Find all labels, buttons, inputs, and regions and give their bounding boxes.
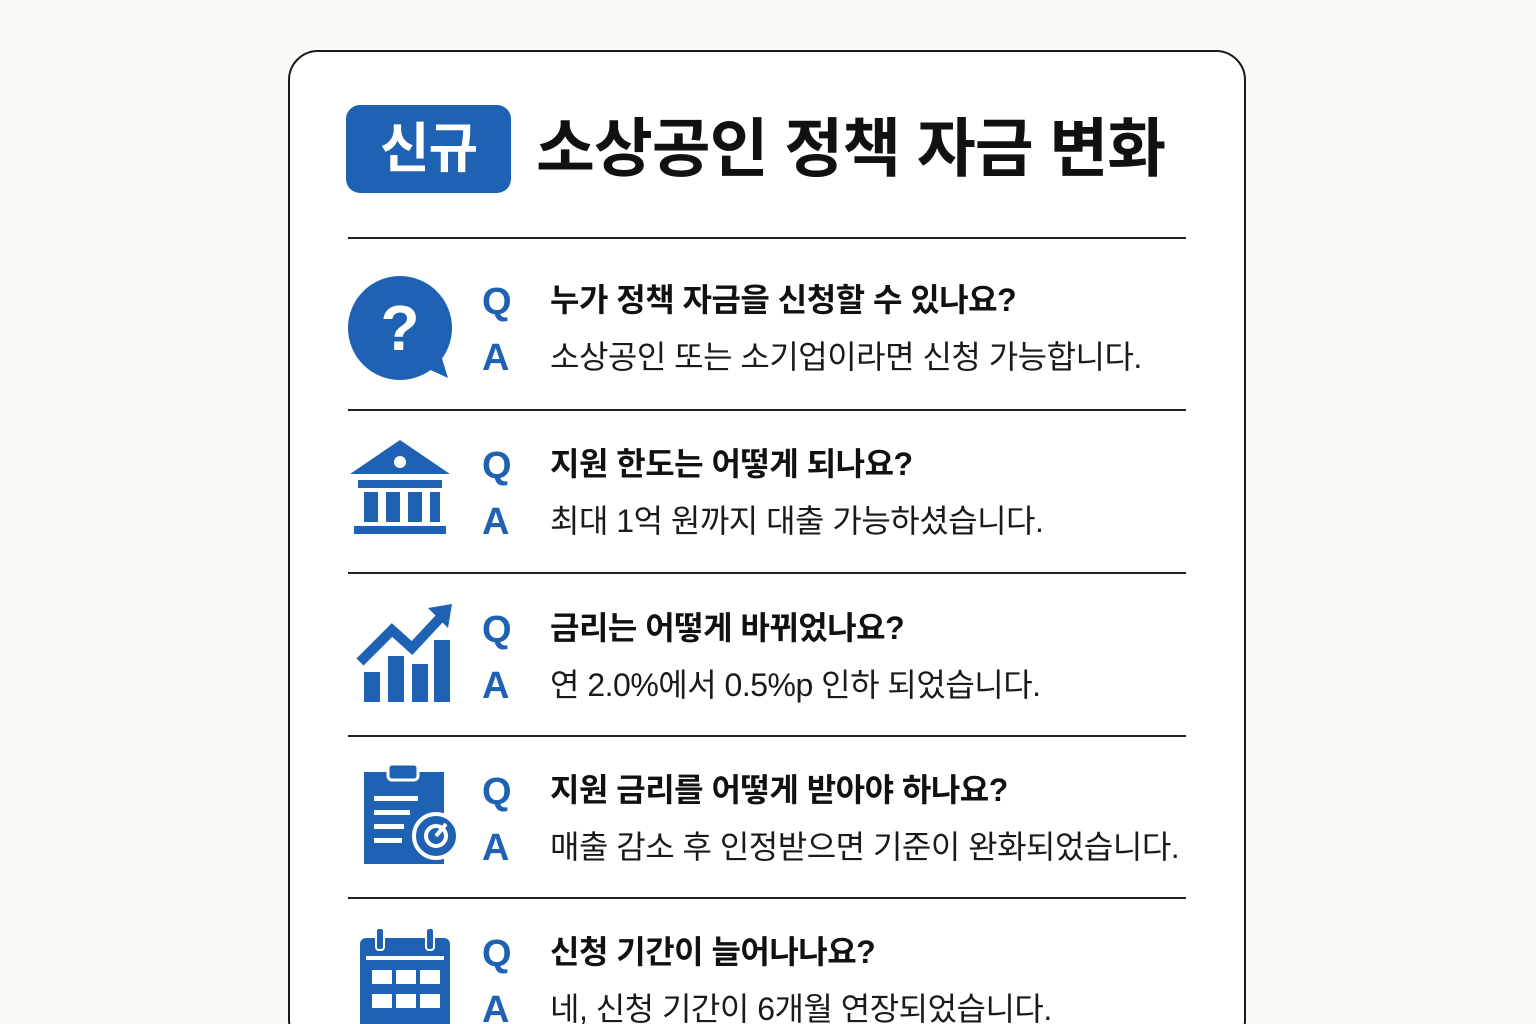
badge: 신규: 신규 (380, 119, 477, 179)
question text: 금리는 어떻게 바뀌었나요? (550, 610, 904, 646)
Q label: Q (482, 281, 512, 323)
icon: clipboard (364, 766, 456, 864)
answer text: 최대 1억 원까지 대출 가능하셨습니다. (550, 503, 1043, 539)
icon: question bubble (348, 276, 452, 380)
icon: bank (350, 440, 450, 534)
question text: 신청 기간이 늘어나나요? (550, 934, 875, 970)
Q label: Q (482, 609, 512, 651)
Q label: Q (482, 445, 512, 487)
A label: A (482, 665, 509, 707)
answer text: 소상공인 또는 소기업이라면 신청 가능합니다. (550, 339, 1142, 375)
answer text: 연 2.0%에서 0.5%p 인하 되었습니다. (550, 667, 1041, 703)
Q label: Q (482, 771, 512, 813)
row 4: documents (364, 766, 1179, 869)
answer text: 매출 감소 후 인정받으면 기준이 완화되었습니다. (550, 829, 1179, 865)
icon: rising chart (356, 604, 452, 702)
title: 소상공인 정책 자금 변화 (536, 113, 1165, 185)
question text: 지원 한도는 어떻게 되나요? (550, 446, 913, 482)
row 1: eligibility (348, 276, 1142, 380)
badge: 신규 (346, 105, 511, 193)
Q label: Q (482, 933, 512, 975)
card panel (288, 50, 1246, 1024)
question text: 지원 금리를 어떻게 받아야 하나요? (550, 772, 1008, 808)
row 3: interest rate (356, 604, 1041, 707)
A label: A (482, 337, 509, 379)
question text: 누가 정책 자금을 신청할 수 있나요? (550, 282, 1016, 318)
icon: calendar (360, 929, 450, 1024)
icon: question bubble: ? (380, 292, 420, 364)
row 5: application period (360, 929, 1052, 1024)
A label: A (482, 501, 509, 543)
A label: A (482, 827, 509, 869)
row 2: limit (350, 440, 1043, 543)
